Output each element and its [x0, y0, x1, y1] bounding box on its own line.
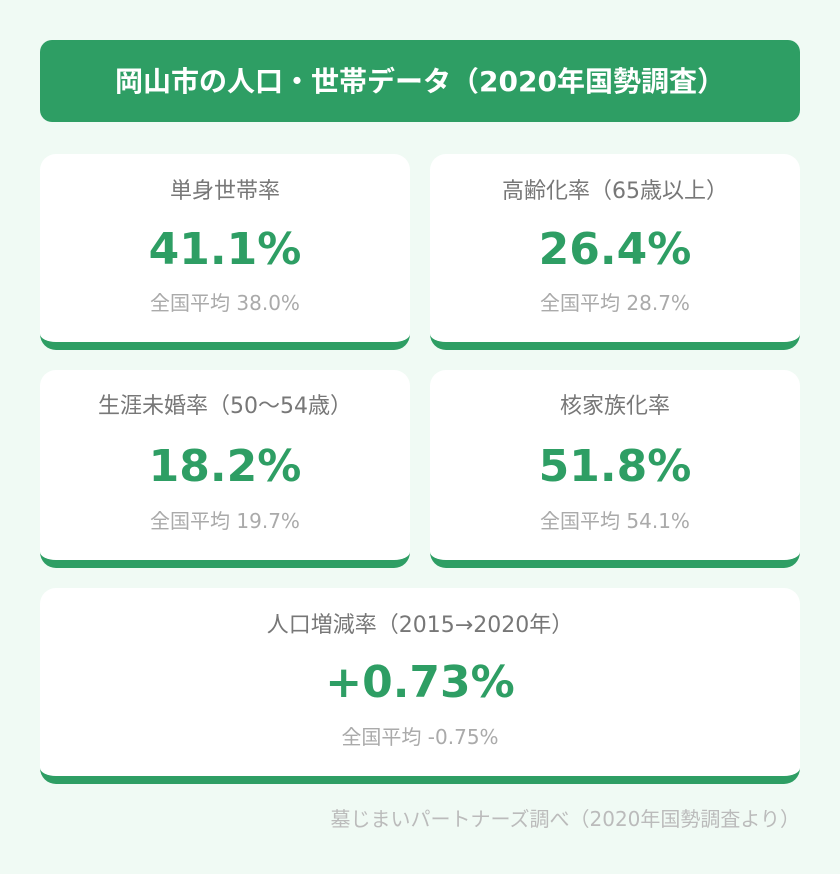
- source note: 墓じまいパートナーズ調べ（2020年国勢調査より）: [330, 807, 800, 831]
- title: 岡山市の人口・世帯データ（2020年国勢調査）: [115, 65, 725, 98]
- panel: aging rate: 全国平均 28.7%: [540, 291, 690, 315]
- panel: nuclear family rate: 51.8%: [539, 441, 691, 492]
- panel: population change rate: 人口増減率（2015→2020年）: [267, 613, 573, 638]
- panel: lifetime unmarried rate: 18.2%: [149, 441, 301, 492]
- panel: single household rate: 全国平均 38.0%: [150, 291, 300, 315]
- panel: aging rate: 26.4%: [539, 224, 691, 275]
- panel: lifetime unmarried rate: [40, 370, 410, 568]
- panel: single household rate: 41.1%: [149, 224, 301, 275]
- panel: nuclear family rate: 核家族化率: [560, 394, 670, 419]
- panel: lifetime unmarried rate: 生涯未婚率（50～54歳）: [98, 394, 352, 419]
- panel: nuclear family rate: [430, 370, 800, 568]
- panel: single household rate: [40, 154, 410, 350]
- panel: aging rate: 高齢化率（65歳以上）: [502, 179, 728, 204]
- panel: single household rate: 単身世帯率: [170, 179, 280, 204]
- panel: population change rate: +0.73%: [325, 657, 515, 708]
- panel: population change rate: 全国平均 -0.75%: [341, 725, 499, 749]
- panel: population change rate: [40, 588, 800, 784]
- panel: aging rate: [430, 154, 800, 350]
- title: [40, 40, 800, 122]
- panel: nuclear family rate: 全国平均 54.1%: [540, 509, 690, 533]
- panel: lifetime unmarried rate: 全国平均 19.7%: [150, 509, 300, 533]
